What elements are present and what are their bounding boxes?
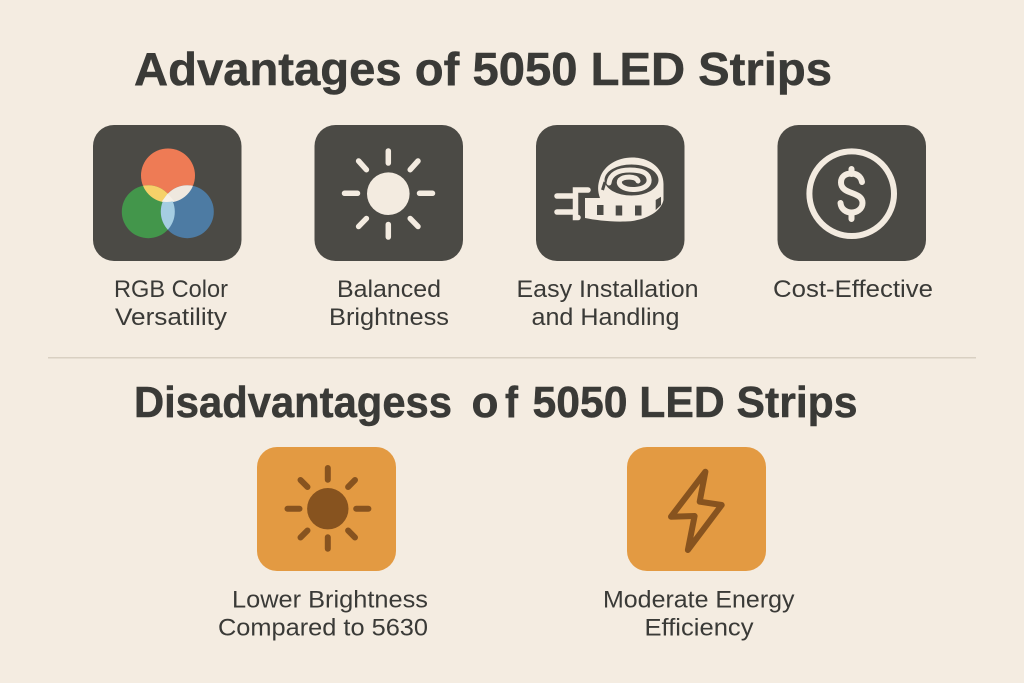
- icon: RGB color circles: [93, 125, 242, 261]
- label: Lower Brightness Compared to 5630: Lower Brightness: [232, 586, 428, 614]
- label: Cost-Effective: Cost-Effective: [773, 276, 933, 303]
- label: Easy Installation and Handling: Easy Installation: [516, 276, 698, 303]
- panel: balanced brightness: [314, 125, 463, 331]
- title: disadvantages: o: [472, 378, 498, 427]
- label: Moderate Energy Efficiency: Moderate Energy: [603, 586, 795, 614]
- title: disadvantages: 5050 LED Strips: [532, 378, 858, 427]
- icon: sun: [314, 125, 463, 261]
- title: disadvantages: f: [505, 378, 518, 427]
- label: Easy Installation and Handling: and Handling: [532, 304, 680, 331]
- icon: lightning bolt: [627, 447, 766, 571]
- title: disadvantages: Disadvantagess: [134, 378, 452, 427]
- icon: dim sun: [257, 447, 396, 571]
- label: Balanced Brightness: Brightness: [329, 304, 449, 331]
- panel: cost-effective: [773, 125, 933, 303]
- icon: dollar coin: [778, 125, 926, 261]
- label: Balanced Brightness: Balanced: [337, 276, 441, 303]
- panel: RGB color versatility: [93, 125, 242, 331]
- label: Lower Brightness Compared to 5630: Compared to 5630: [218, 614, 428, 642]
- icon: LED strip roll: [536, 125, 684, 261]
- label: Moderate Energy Efficiency: Efficiency: [644, 614, 754, 642]
- panel: lower brightness: [218, 447, 428, 642]
- label: RGB Color Versatility: RGB Color: [114, 276, 228, 303]
- title: advantages: Advantages of 5050 LED Strips: [134, 43, 832, 95]
- panel: easy installation: [516, 125, 698, 331]
- panel: moderate energy efficiency: [603, 447, 795, 642]
- label: RGB Color Versatility: Versatility: [115, 304, 228, 331]
